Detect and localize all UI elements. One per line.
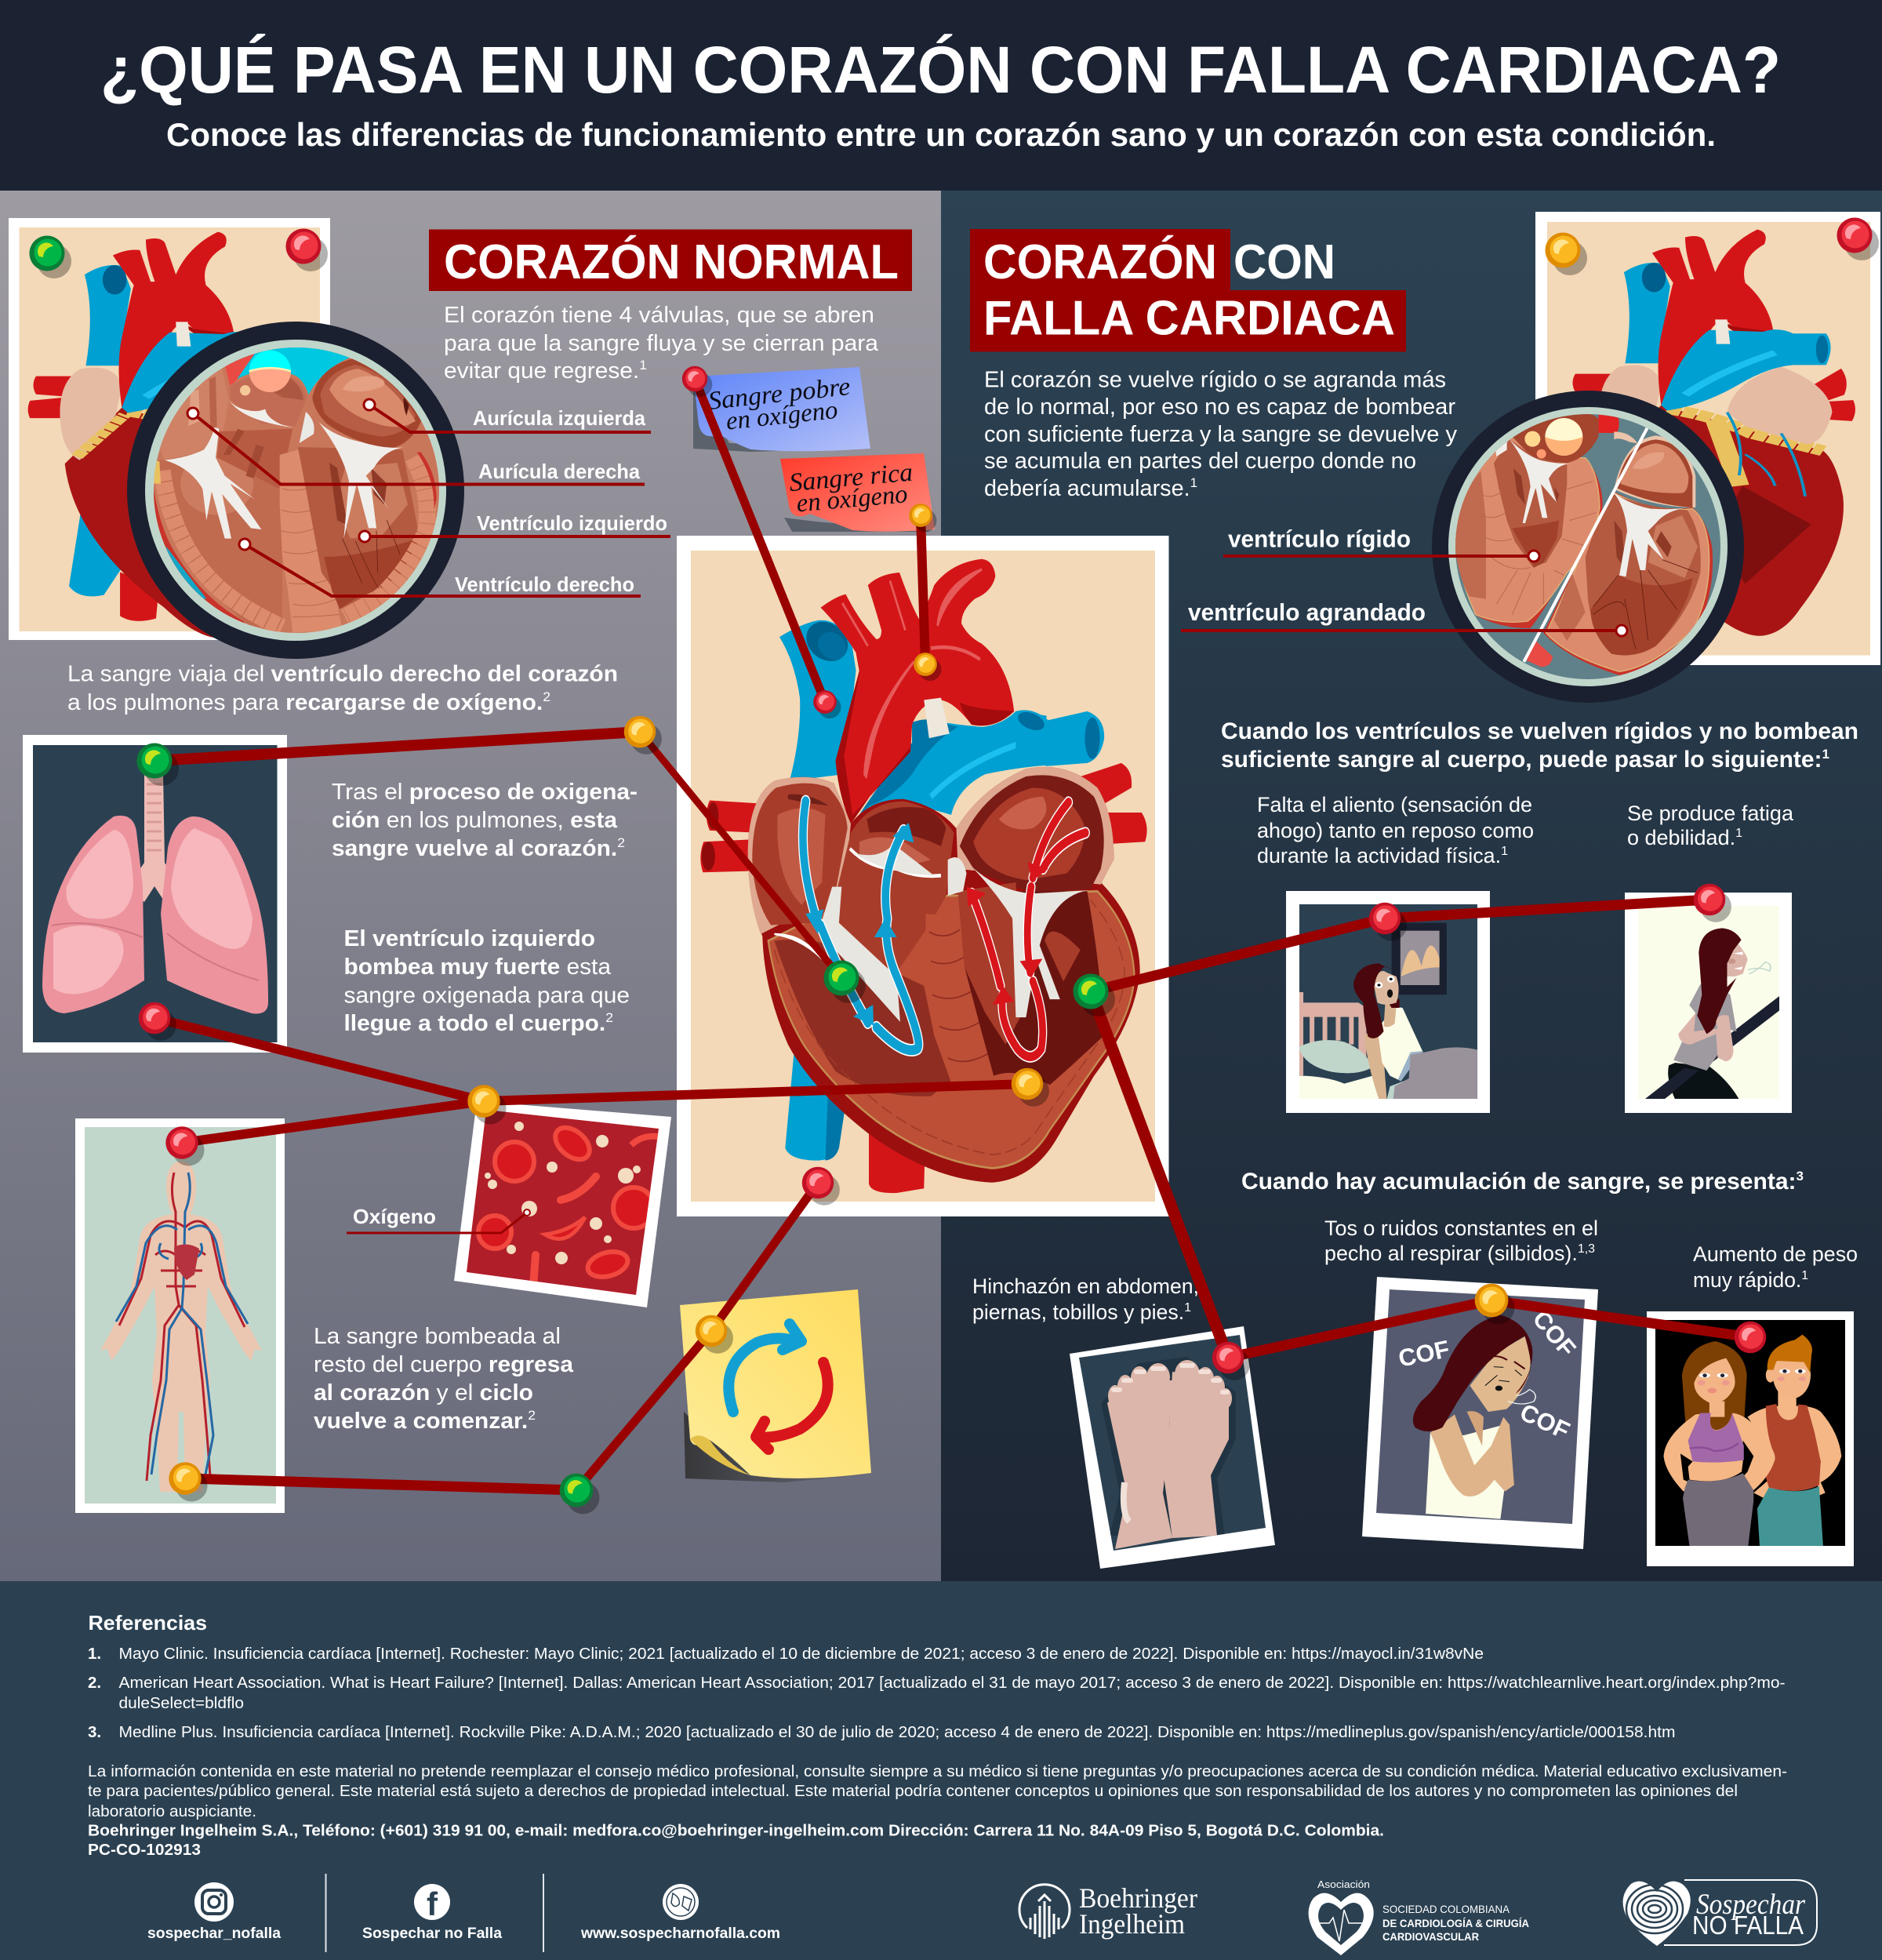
sticky note: blood rich in oxygen: en oxígeno (795, 480, 909, 518)
text: fatigue: 1 (1735, 827, 1742, 840)
photo: main heart (677, 536, 1168, 1216)
logo: sociedad colombiana de cardiología: SOCIEDAD COLOMBIANA (1382, 1903, 1510, 1915)
sticky note: blood poor in oxygen (693, 367, 870, 452)
sticky note: cycle arrows (680, 1289, 871, 1482)
text: weight gain (1693, 1242, 1858, 1292)
text: heart failure description: El corazón se vuelve rígido o se agranda más (984, 367, 1446, 392)
text: shortness of breath: Falta el aliento (sensación de (1257, 793, 1532, 816)
footer: disclaimer: La información contenida en este material no pretende reemplazar el consejo médico profesional, consulte siempre a su médico si tiene preguntas y/o preocupaciones acerca de su condición médica. Material educativo exclusivamen- (88, 1762, 1787, 1780)
text: oxygenation returns to heart: Tras el proceso de oxigena- (332, 780, 638, 805)
text: weight gain: 1 (1801, 1269, 1808, 1282)
text: left ventricle pumps (343, 926, 630, 1036)
labels: ventricles: ventrículo rígido (1228, 525, 1411, 552)
logo: boehringer ingelheim: Boehringer (1079, 1882, 1197, 1914)
text: blood returns, cycle restarts: La sangre bombeada al (314, 1324, 561, 1349)
heading: corazón con falla cardiaca: CON (1233, 235, 1335, 289)
labels: heart chambers: Aurícula derecha (478, 460, 641, 483)
text: swelling: Hinchazón en abdomen, (972, 1275, 1199, 1298)
text: heart failure description: se acumula en partes del cuerpo donde no (984, 449, 1416, 474)
labels: heart chambers (455, 406, 667, 596)
text: blood accumulation heading: 3 (1797, 1169, 1804, 1184)
logo: sociedad colombiana de cardiología: CARDIOVASCULAR (1382, 1930, 1479, 1943)
photo: blood cells with oxygen (454, 1101, 671, 1307)
photo: circulatory system body (75, 1118, 285, 1513)
text: blood travels to lungs (67, 662, 618, 715)
panel: normal heart background (0, 191, 941, 1581)
text: rigid ventricles heading: 1 (1822, 747, 1829, 762)
text: shortness of breath: 1 (1501, 845, 1508, 858)
text: valves description: 1 (639, 358, 647, 373)
icon: facebook: f (427, 1885, 438, 1922)
text: blood travels to lungs: a los pulmones para recargarse de oxígeno. (67, 690, 535, 715)
text: fatigue (1627, 802, 1794, 849)
label: cof: COF (1396, 1335, 1451, 1373)
leader dots (1528, 551, 1627, 636)
leader lines (193, 405, 670, 596)
logo: sospechar no falla: Sospechar (1696, 1889, 1806, 1921)
icon: globe (663, 1884, 699, 1920)
footer: references: Referencias (88, 1611, 207, 1635)
title: ¿QUÉ PASA EN UN CORAZÓN CON FALLA CARDIACA? (100, 33, 1781, 107)
photo: woman short of breath in bed (1286, 891, 1490, 1113)
text: valves description: para que la sangre fluya y se cierran para (444, 331, 879, 356)
logo: sociedad colombiana de cardiología (1309, 1878, 1529, 1955)
photo: couple with weight gain (1647, 1311, 1854, 1566)
text: oxygenation returns to heart: 2 (617, 835, 625, 850)
footer: disclaimer: te para pacientes/público general. Este material está sujeto a derechos de propiedad intelectual. Este material podría contener conceptos u opiniones que son responsabilidad de los autores y no comprometen las opiniones del (88, 1782, 1738, 1800)
text: shortness of breath (1257, 793, 1534, 867)
sticky note: blood poor in oxygen: Sangre pobre (707, 373, 852, 416)
text: blood returns, cycle restarts: 2 (528, 1408, 536, 1423)
text: swelling: piernas, tobillos y pies. (972, 1300, 1186, 1324)
text: left ventricle pumps: bombea muy fuerte esta (343, 955, 612, 980)
logo: sospechar no falla: NO FALLA (1692, 1911, 1804, 1940)
text: rigid ventricles heading (1221, 718, 1858, 773)
icon: facebook (414, 1884, 450, 1922)
footer: references: 1. (88, 1645, 101, 1663)
label: facebook page: Sospechar no Falla (362, 1925, 502, 1942)
pins (30, 218, 1879, 1514)
sticky note: blood rich in oxygen (780, 453, 935, 532)
sticky note: blood poor in oxygen: en oxígeno (725, 396, 839, 436)
sticky note: blood rich in oxygen: Sangre rica (788, 459, 914, 497)
text: oxygenation returns to heart: ción en los pulmones, esta (332, 808, 618, 833)
text: cough: pecho al respirar (silbidos). (1324, 1242, 1579, 1265)
heading: corazón con falla cardiaca: FALLA CARDIACA (983, 292, 1395, 345)
footer: disclaimer: laboratorio auspiciante. (88, 1802, 256, 1820)
text: left ventricle pumps: llegue a todo el cuerpo. (343, 1011, 605, 1036)
footer: references (88, 1611, 1785, 1741)
text: valves description: evitar que regrese. (444, 358, 634, 384)
text: oxygenation returns to heart (332, 780, 638, 861)
text: cough: Tos o ruidos constantes en el (1324, 1216, 1598, 1240)
labels: heart chambers: Aurícula izquierda (473, 406, 646, 430)
label: cof: COF (1516, 1398, 1574, 1445)
text: fatigue: o debilidad. (1627, 826, 1735, 849)
text: blood returns, cycle restarts: vuelve a comenzar. (314, 1409, 528, 1434)
text: rigid ventricles heading: suficiente sangre al cuerpo, puede pasar lo siguiente: (1221, 747, 1822, 773)
text: heart failure description: 1 (1190, 475, 1197, 490)
header band (0, 0, 1882, 191)
text: valves description (444, 303, 879, 384)
panel: heart failure background (941, 191, 1882, 1581)
text: shortness of breath: durante la actividad física. (1257, 844, 1502, 867)
heading: corazón con falla cardiaca (970, 229, 1406, 351)
text: shortness of breath: ahogo) tanto en reposo como (1257, 819, 1534, 842)
label: cof: COF (1528, 1305, 1582, 1362)
magnifier: normal heart interior (127, 322, 670, 659)
logo: boehringer ingelheim: Ingelheim (1079, 1908, 1185, 1940)
text: left ventricle pumps: sangre oxigenada para que (343, 984, 630, 1009)
heading: corazón normal: CORAZÓN NORMAL (444, 235, 899, 289)
label: oxígeno: Oxígeno (353, 1205, 436, 1228)
text: valves description: El corazón tiene 4 válvulas, que se abren (444, 303, 874, 328)
text: heart failure description (984, 367, 1457, 501)
labels: ventricles: ventrículo agrandado (1188, 598, 1426, 626)
footer: references: American Heart Association. What is Heart Failure? [Internet]. Dallas: American Heart Association; 2017 [actualizado el 31 de mayo 2017; acceso 3 de enero de 2022]. Disponible en: https://watchlearnlive.heart.org/index.php?mo- (119, 1674, 1785, 1692)
logo: sospechar no falla (1623, 1880, 1817, 1946)
icon: instagram (194, 1882, 234, 1922)
text: heart failure description: debería acumularse. (984, 476, 1191, 501)
footer: disclaimer: Boehringer Ingelheim S.A., Teléfono: (+601) 319 91 00, e-mail: medfora.co@boehringer-ingelheim.com Dirección: Carrera 11 No. 84A-09 Piso 5, Bogotá D.C. Colombia. (88, 1821, 1384, 1840)
text: blood returns, cycle restarts (314, 1324, 574, 1434)
label: instagram handle: sospechar_nofalla (147, 1925, 281, 1942)
text: heart failure description: con suficiente fuerza y la sangre se devuelve y (984, 422, 1457, 447)
illustration: heart cross-section (700, 559, 1147, 1193)
footer: references: duleSelect=bldflo (119, 1694, 244, 1712)
text: rigid ventricles heading: Cuando los ventrículos se vuelven rígidos y no bombean (1221, 718, 1858, 744)
text: oxygenation returns to heart: sangre vuelve al corazón. (332, 836, 617, 861)
photo: swollen feet (1070, 1326, 1275, 1569)
label: oxígeno (347, 1205, 530, 1233)
text: blood returns, cycle restarts: resto del cuerpo regresa (314, 1352, 574, 1377)
text: weight gain: Aumento de peso (1693, 1242, 1858, 1266)
footer: references: Medline Plus. Insuficiencia cardíaca [Internet]. Rockville Pike: A.D.A.M.; 2020 [actualizado el 30 de julio de 2020; acceso 4 de enero de 2022]. Disponible en: https://medlineplus.gov/spanish/ency/article/000158.htm (119, 1723, 1675, 1741)
text: left ventricle pumps: El ventrículo izquierdo (343, 926, 595, 951)
text: blood travels to lungs: La sangre viaja del ventrículo derecho del corazón (67, 662, 618, 687)
photo: normal heart exterior (9, 218, 330, 640)
text: swelling: 1 (1184, 1301, 1191, 1315)
logo: sociedad colombiana de cardiología: DE CARDIOLOGÍA & CIRUGÍA (1382, 1917, 1529, 1929)
text: blood accumulation heading: Cuando hay acumulación de sangre, se presenta: (1241, 1169, 1796, 1195)
text: weight gain: muy rápido. (1693, 1268, 1804, 1292)
leader lines (1181, 556, 1622, 631)
footer: references: 3. (88, 1723, 101, 1741)
connecting wires (154, 379, 1750, 1490)
text: swelling (972, 1275, 1199, 1324)
text: left ventricle pumps: 2 (605, 1010, 613, 1025)
labels: heart chambers: Ventrículo izquierdo (477, 511, 667, 535)
photo: tired woman on stairs (1625, 893, 1792, 1113)
logo: boehringer ingelheim (1019, 1882, 1197, 1940)
panel: references footer background (0, 1581, 1882, 1960)
footer: references: Mayo Clinic. Insuficiencia cardíaca [Internet]. Rochester: Mayo Clinic; 2021 [actualizado el 10 de diciembre de 2021; acceso 3 de enero de 2022]. Disponible en: https://mayocl.in/31w8vNe (119, 1645, 1484, 1663)
subtitle: Conoce las diferencias de funcionamiento entre un corazón sano y un corazón con esta condición. (166, 116, 1716, 153)
text: heart failure description: de lo normal, por eso no es capaz de bombear (984, 395, 1455, 420)
text: cough: 1,3 (1578, 1242, 1595, 1256)
logo: sociedad colombiana de cardiología: Asociación (1317, 1878, 1370, 1890)
magnifier: failing heart interior (1181, 391, 1744, 703)
footer: references: 2. (88, 1674, 101, 1692)
text: blood travels to lungs: 2 (543, 689, 550, 704)
labels: heart chambers: Ventrículo derecho (455, 573, 634, 596)
photo: failing heart exterior (1535, 212, 1880, 665)
icon: blue cycle arrow (728, 1324, 801, 1412)
text: cough (1324, 1216, 1598, 1265)
label: website: www.sospecharnofalla.com (580, 1925, 780, 1942)
photo: lungs (23, 735, 287, 1053)
text: blood returns, cycle restarts: al corazón y el ciclo (314, 1380, 533, 1405)
footer: disclaimer: PC-CO-102913 (88, 1841, 201, 1859)
photo: coughing woman (1362, 1277, 1598, 1549)
text: fatigue: Se produce fatiga (1627, 802, 1794, 825)
footer: disclaimer (88, 1762, 1787, 1859)
labels: ventricles (1188, 525, 1426, 626)
leader dots (187, 399, 375, 550)
heading: corazón con falla cardiaca: CORAZÓN (983, 235, 1217, 289)
icon: red cycle arrow (756, 1362, 828, 1449)
